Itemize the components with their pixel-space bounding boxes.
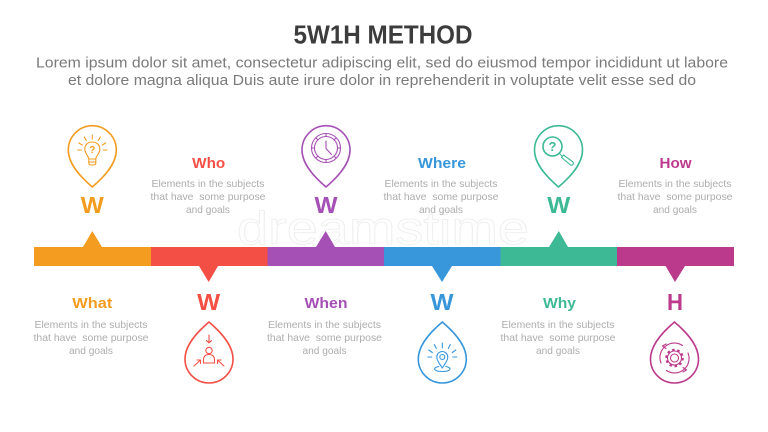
icon: light bulb pin xyxy=(68,126,116,187)
letter W: W xyxy=(547,192,571,218)
letter W: W xyxy=(197,289,220,315)
text: who: Elements in the subjects xyxy=(152,178,264,190)
icon: light bulb pin: ? xyxy=(89,145,95,156)
text: how: that have some purpose xyxy=(618,191,733,203)
text: what: and goals xyxy=(69,345,113,357)
heading: when: When xyxy=(304,296,348,312)
panel: where xyxy=(384,156,499,383)
watermark: dreamstime xyxy=(237,202,529,254)
panel: when xyxy=(267,126,382,357)
text: when: that have some purpose xyxy=(267,332,382,344)
heading: where: Where xyxy=(418,156,466,172)
text: when xyxy=(267,319,382,357)
subtitle xyxy=(36,54,728,89)
text: where: that have some purpose xyxy=(384,191,499,203)
text: when: Elements in the subjects xyxy=(268,319,381,331)
icon: location drop xyxy=(418,322,466,383)
text: what: Elements in the subjects xyxy=(34,319,148,331)
icon: people drop xyxy=(185,322,233,383)
text: how xyxy=(618,178,733,216)
text: why: Elements in the subjects xyxy=(502,319,614,331)
letter W: W xyxy=(314,192,338,218)
icon: clock pin xyxy=(302,126,350,187)
text: where xyxy=(384,178,499,216)
text: who: that have some purpose xyxy=(150,191,266,203)
heading: why: Why xyxy=(543,296,576,312)
letter W: W xyxy=(81,192,104,218)
text: who: and goals xyxy=(186,204,230,216)
text: why xyxy=(500,319,616,357)
heading: what: What xyxy=(72,296,112,312)
heading: who: Who xyxy=(192,156,225,172)
letter W: W xyxy=(430,289,454,315)
text: where: Elements in the subjects xyxy=(384,178,498,190)
text: who xyxy=(150,178,266,216)
panel: what xyxy=(34,126,149,357)
text: how: and goals xyxy=(653,204,697,216)
heading: how: How xyxy=(660,156,692,172)
letter H: H xyxy=(667,289,683,315)
text: why: and goals xyxy=(536,345,580,357)
title: 5W1H METHOD xyxy=(294,20,472,50)
text: what xyxy=(34,319,149,357)
icon: magnifier pin xyxy=(534,126,582,187)
panel: why xyxy=(500,126,616,357)
timeline bar xyxy=(34,231,734,282)
panel: who xyxy=(150,156,266,383)
subtitle: et dolore magna aliqua Duis aute irure dolor in reprehenderit in voluptate velit esse sed do xyxy=(68,72,696,89)
text: why: that have some purpose xyxy=(500,332,616,344)
text: when: and goals xyxy=(302,345,346,357)
text: how: Elements in the subjects xyxy=(618,178,732,190)
panel: how xyxy=(618,156,733,383)
icon: gear drop xyxy=(650,322,698,383)
subtitle: Lorem ipsum dolor sit amet, consectetur adipiscing elit, sed do eiusmod tempor incididunt ut labore xyxy=(36,54,728,72)
text: what: that have some purpose xyxy=(34,332,149,344)
icon: magnifier pin: ? xyxy=(549,139,557,154)
text: where: and goals xyxy=(419,204,463,216)
